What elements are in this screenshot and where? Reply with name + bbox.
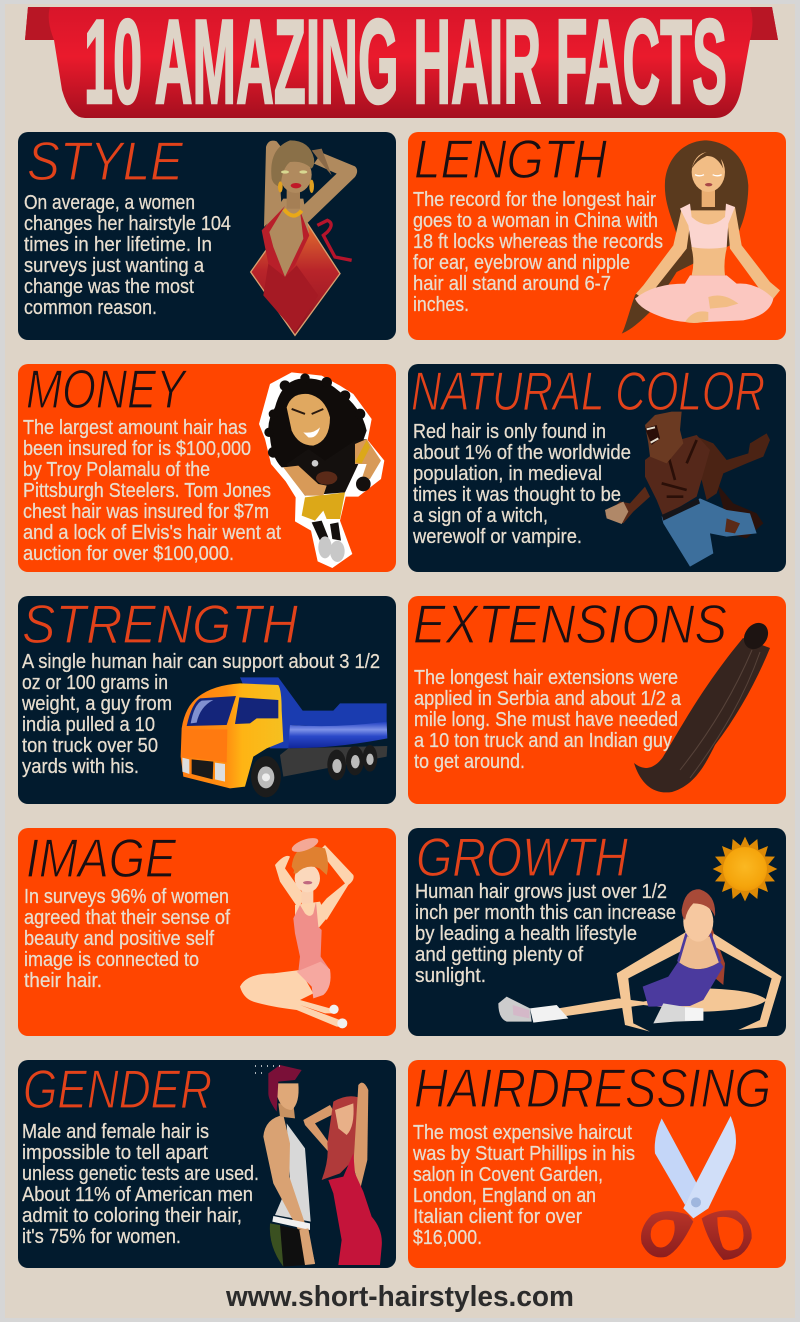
text: hairdressing fact: London, England on an bbox=[413, 1185, 596, 1207]
text: money fact: chest hair was insured for $7m bbox=[23, 501, 269, 523]
text: gender fact: About 11% of American men bbox=[22, 1184, 253, 1206]
text: strength fact: yards with his. bbox=[22, 756, 139, 778]
text: natural color fact: times it was thought to be bbox=[413, 484, 621, 506]
text: strength fact bbox=[21, 651, 380, 778]
text: hairdressing fact: $16,000. bbox=[413, 1227, 482, 1249]
text: growth fact: by leading a health lifestyle bbox=[415, 923, 637, 945]
text: growth fact: inch per month this can increase bbox=[415, 902, 676, 924]
text: strength fact: oz or 100 grams in bbox=[22, 672, 168, 694]
text: image fact: beauty and positive self bbox=[24, 928, 214, 950]
text: strength fact: A single human hair can support about 3 1/2 bbox=[22, 651, 380, 673]
panel: style bbox=[18, 130, 396, 340]
text: extensions fact bbox=[414, 667, 682, 773]
heading: gender: GENDER bbox=[23, 1058, 212, 1120]
text: natural color fact bbox=[412, 421, 631, 548]
title banner bbox=[25, 0, 778, 129]
text: money fact bbox=[23, 417, 281, 565]
text: style fact: On average, a women bbox=[24, 192, 195, 214]
text: extensions fact: a 10 ton truck and an Indian guy bbox=[414, 730, 672, 752]
text: length fact: The record for the longest hair bbox=[413, 189, 656, 211]
illustration: ponytail hair extension bbox=[634, 618, 773, 792]
illustration: werewolf bbox=[605, 412, 770, 567]
heading: style: STYLE bbox=[27, 130, 184, 192]
illustration: stretching woman bbox=[498, 889, 782, 1032]
text: natural color fact: about 1% of the worldwide bbox=[413, 442, 631, 464]
panel: length bbox=[408, 128, 786, 340]
text: style fact: change was the most bbox=[24, 276, 194, 298]
text: money fact: Pittsburgh Steelers. Tom Jones bbox=[23, 480, 271, 502]
text: length fact bbox=[413, 189, 663, 316]
text: image fact: agreed that their sense of bbox=[24, 907, 230, 929]
decorative dots bbox=[255, 1066, 280, 1073]
text: length fact: 18 ft locks whereas the records bbox=[413, 231, 663, 253]
text: hairdressing fact bbox=[412, 1122, 635, 1249]
text: image fact bbox=[24, 886, 230, 992]
text: gender fact: admit to coloring their hair, bbox=[22, 1205, 242, 1227]
panel: extensions bbox=[408, 593, 786, 804]
text: growth fact bbox=[415, 881, 676, 987]
text: image fact: their hair. bbox=[24, 970, 102, 992]
panel: growth bbox=[408, 826, 786, 1036]
text: growth fact: and getting plenty of bbox=[415, 944, 583, 966]
text: image fact: image is connected to bbox=[24, 949, 199, 971]
text: gender fact: it's 75% for women. bbox=[22, 1226, 181, 1248]
text: image fact: In surveys 96% of women bbox=[24, 886, 229, 908]
illustration: man and woman bbox=[263, 1065, 382, 1267]
text: length fact: inches. bbox=[413, 294, 469, 316]
heading: strength: STRENGTH bbox=[22, 593, 298, 655]
heading: growth: GROWTH bbox=[416, 826, 628, 888]
text: extensions fact: to get around. bbox=[414, 751, 525, 773]
heading: extensions: EXTENSIONS bbox=[413, 593, 727, 655]
text: strength fact: india pulled a 10 bbox=[22, 714, 155, 736]
text: money fact: auction for over $100,000. bbox=[23, 543, 234, 565]
panel: hairdressing bbox=[408, 1057, 786, 1268]
text: style fact bbox=[24, 192, 231, 319]
illustration: meditating woman with long hair bbox=[622, 140, 780, 334]
text: strength fact: weight, a guy from bbox=[21, 693, 172, 715]
panel: money bbox=[18, 358, 396, 572]
text: natural color fact: werewolf or vampire. bbox=[412, 526, 582, 548]
text: extensions fact: applied in Serbia and about 1/2 a bbox=[414, 688, 682, 710]
text: style fact: times in her lifetime. In bbox=[24, 234, 212, 256]
footer: website url: www.short-hairstyles.com bbox=[225, 1281, 574, 1313]
illustration: sun bbox=[713, 837, 777, 901]
text: length fact: goes to a woman in China with bbox=[413, 210, 658, 232]
text: extensions fact: mile long. She must have needed bbox=[414, 709, 678, 731]
text: hairdressing fact: salon in Covent Garden, bbox=[413, 1164, 603, 1186]
text: length fact: hair all stand around 6-7 bbox=[413, 273, 611, 295]
text: natural color fact: Red hair is only found in bbox=[413, 421, 606, 443]
heading: length: LENGTH bbox=[414, 128, 607, 190]
text: natural color fact: population, in medieval bbox=[413, 463, 602, 485]
text: gender fact: impossible to tell apart bbox=[22, 1142, 208, 1164]
illustration: scissors bbox=[641, 1116, 752, 1260]
illustration: seated woman in pink bbox=[240, 835, 354, 1028]
heading: image: IMAGE bbox=[26, 827, 177, 889]
panel: image bbox=[18, 827, 396, 1036]
text: strength fact: ton truck over 50 bbox=[22, 735, 158, 757]
panel: gender bbox=[18, 1058, 396, 1268]
text: gender fact: Male and female hair is bbox=[22, 1121, 209, 1143]
text: money fact: The largest amount hair has bbox=[23, 417, 247, 439]
text: money fact: by Troy Polamalu of the bbox=[23, 459, 210, 481]
text: extensions fact: The longest hair extensions were bbox=[414, 667, 678, 689]
text: growth fact: sunlight. bbox=[415, 965, 486, 987]
illustration: woman in red dress bbox=[251, 140, 357, 335]
heading: money: MONEY bbox=[26, 358, 188, 420]
text: natural color fact: a sign of a witch, bbox=[413, 505, 548, 527]
illustration: truck bbox=[181, 677, 387, 797]
text: hairdressing fact: Italian client for over bbox=[413, 1206, 582, 1228]
text: length fact: for ear, eyebrow and nipple bbox=[413, 252, 630, 274]
text: growth fact: Human hair grows just over 1/2 bbox=[415, 881, 667, 903]
panel: strength bbox=[18, 593, 396, 804]
text: style fact: surveys just wanting a bbox=[24, 255, 205, 277]
text: money fact: been insured for is $100,000 bbox=[23, 438, 251, 460]
text: gender fact bbox=[22, 1121, 259, 1248]
panel: natural color bbox=[408, 360, 786, 572]
text: hairdressing fact: The most expensive haircut bbox=[413, 1122, 632, 1144]
text: style fact: changes her hairstyle 104 bbox=[24, 213, 231, 235]
illustration: football player caricature bbox=[259, 372, 384, 568]
text: hairdressing fact: was by Stuart Phillips in his bbox=[412, 1143, 635, 1165]
text: gender fact: unless genetic tests are used. bbox=[22, 1163, 259, 1185]
text: money fact: and a lock of Elvis's hair went at bbox=[23, 522, 281, 544]
text: style fact: common reason. bbox=[24, 297, 157, 319]
